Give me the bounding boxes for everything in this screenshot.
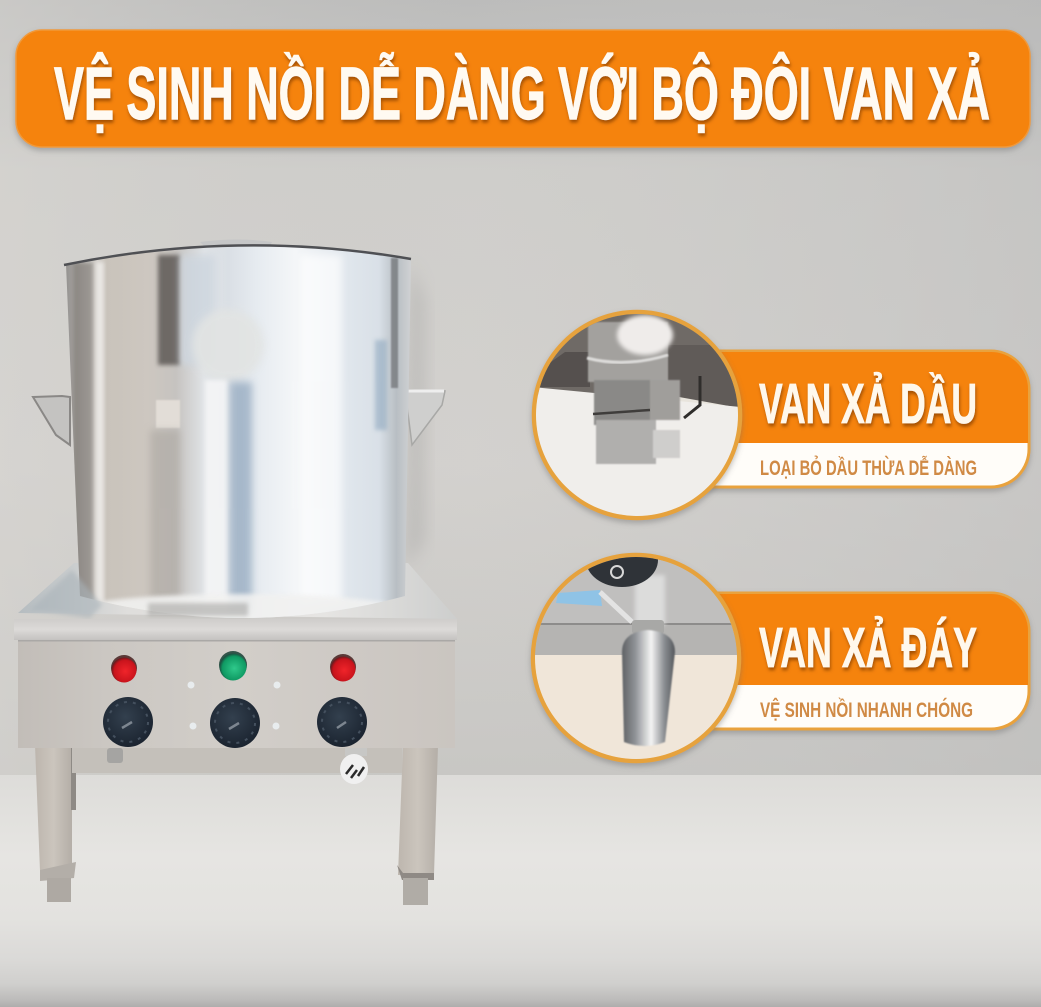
callout: van xa dau xyxy=(530,310,1029,525)
control panel xyxy=(18,641,455,748)
stand tray top xyxy=(18,563,457,619)
pot shadow on wall xyxy=(405,262,425,570)
stand legs xyxy=(35,745,438,905)
title banner xyxy=(16,30,1030,147)
pot lid and rim xyxy=(64,240,411,265)
indicator lights xyxy=(111,651,356,682)
product: stainless steel electric pot on stand xyxy=(14,235,457,905)
control knobs xyxy=(103,697,367,748)
pot handles xyxy=(33,390,445,445)
back rail under panel xyxy=(72,745,402,773)
drain valve under panel xyxy=(107,748,368,784)
panel screws xyxy=(188,682,280,730)
circle photo: oil valve xyxy=(530,310,740,525)
pot body xyxy=(64,235,414,635)
circle photo: bottom drain valve xyxy=(530,533,745,765)
stand lip xyxy=(14,619,457,640)
label pill xyxy=(700,351,1029,487)
callout: van xa day xyxy=(530,533,1029,765)
label pill xyxy=(700,593,1029,729)
pot base reflections xyxy=(30,570,248,618)
